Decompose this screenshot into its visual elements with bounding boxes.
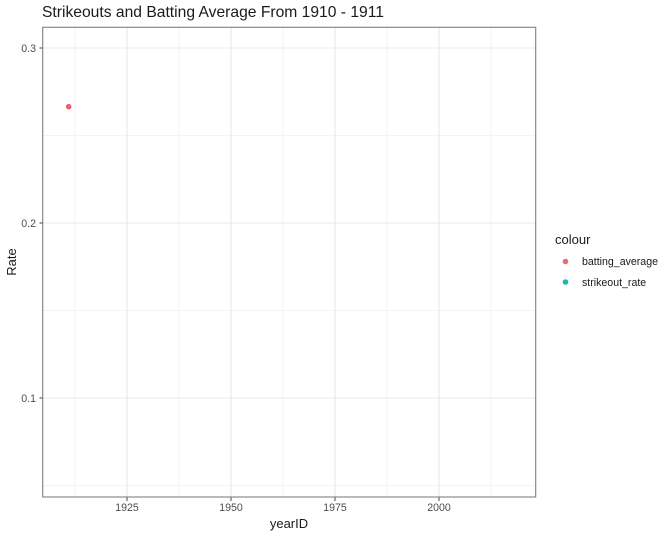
panel border xyxy=(43,27,536,497)
y axis ticks and labels: 0.1 xyxy=(21,393,36,405)
y axis ticks and labels: 0.2 xyxy=(21,218,36,230)
legend item: batting average: batting_average xyxy=(582,256,658,268)
x axis title: yearID xyxy=(270,516,308,531)
x axis ticks and labels: 2000 xyxy=(427,502,451,514)
x axis ticks and labels: 1925 xyxy=(115,502,139,514)
legend xyxy=(555,232,658,289)
legend item: strikeout rate: strikeout_rate xyxy=(582,277,646,289)
data point: batting average xyxy=(66,104,71,109)
x axis ticks and labels: 1975 xyxy=(323,502,347,514)
y axis ticks and labels xyxy=(21,43,42,405)
x axis ticks and labels: 1950 xyxy=(219,502,243,514)
legend title: colour xyxy=(555,232,591,247)
x axis ticks and labels xyxy=(115,498,451,514)
y axis ticks and labels: 0.3 xyxy=(21,43,36,55)
y axis title: Rate xyxy=(4,248,19,276)
title: Strikeouts and Batting Average From 1910 - 1911 xyxy=(42,4,384,21)
